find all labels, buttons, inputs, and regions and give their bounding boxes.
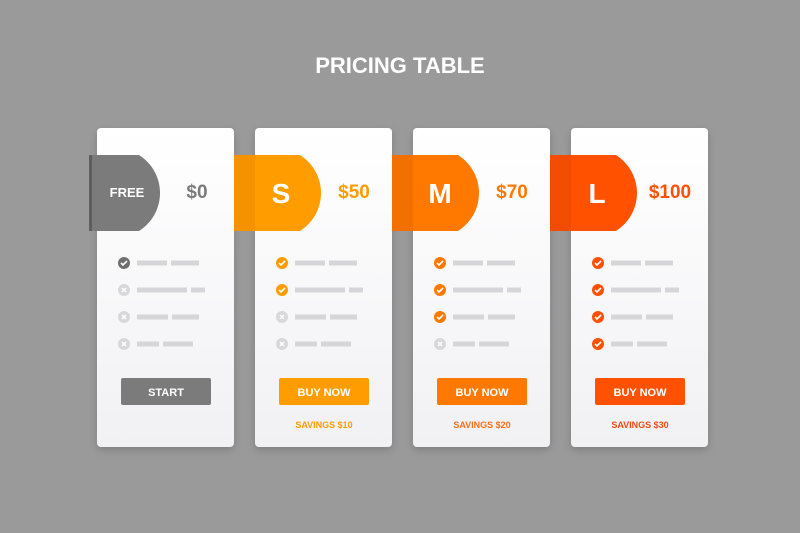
button: S: BUY NOW [298,387,351,399]
panel: L [550,128,708,447]
price: M: $70 [496,182,528,203]
price: free: $0 [186,182,208,203]
tab: S [234,155,321,231]
tab: M [392,155,479,231]
price: L: $100 [649,182,691,203]
savings: M: SAVINGS $20 [453,420,511,430]
savings: S: SAVINGS $10 [295,420,353,430]
tab: M: M [428,178,452,209]
tab: L [550,155,637,231]
features: free [118,257,205,350]
features: L [592,257,679,350]
panel: M [392,128,550,447]
button: M: BUY NOW [456,387,509,399]
price: S: $50 [338,182,370,203]
tab: L: L [588,178,606,209]
button: S [279,378,369,405]
title: PRICING TABLE [315,53,485,78]
panel: S [234,128,392,447]
button: start: START [148,387,184,399]
button: L: BUY NOW [614,387,667,399]
features: S [276,257,363,350]
savings: L: SAVINGS $30 [611,420,669,430]
button: start [121,378,211,405]
features: M [434,257,521,350]
button: M [437,378,527,405]
tab: free: FREE [110,185,145,200]
button: L [595,378,685,405]
tab: free [89,155,160,231]
panel: free [89,128,234,447]
tab: S: S [272,178,290,209]
